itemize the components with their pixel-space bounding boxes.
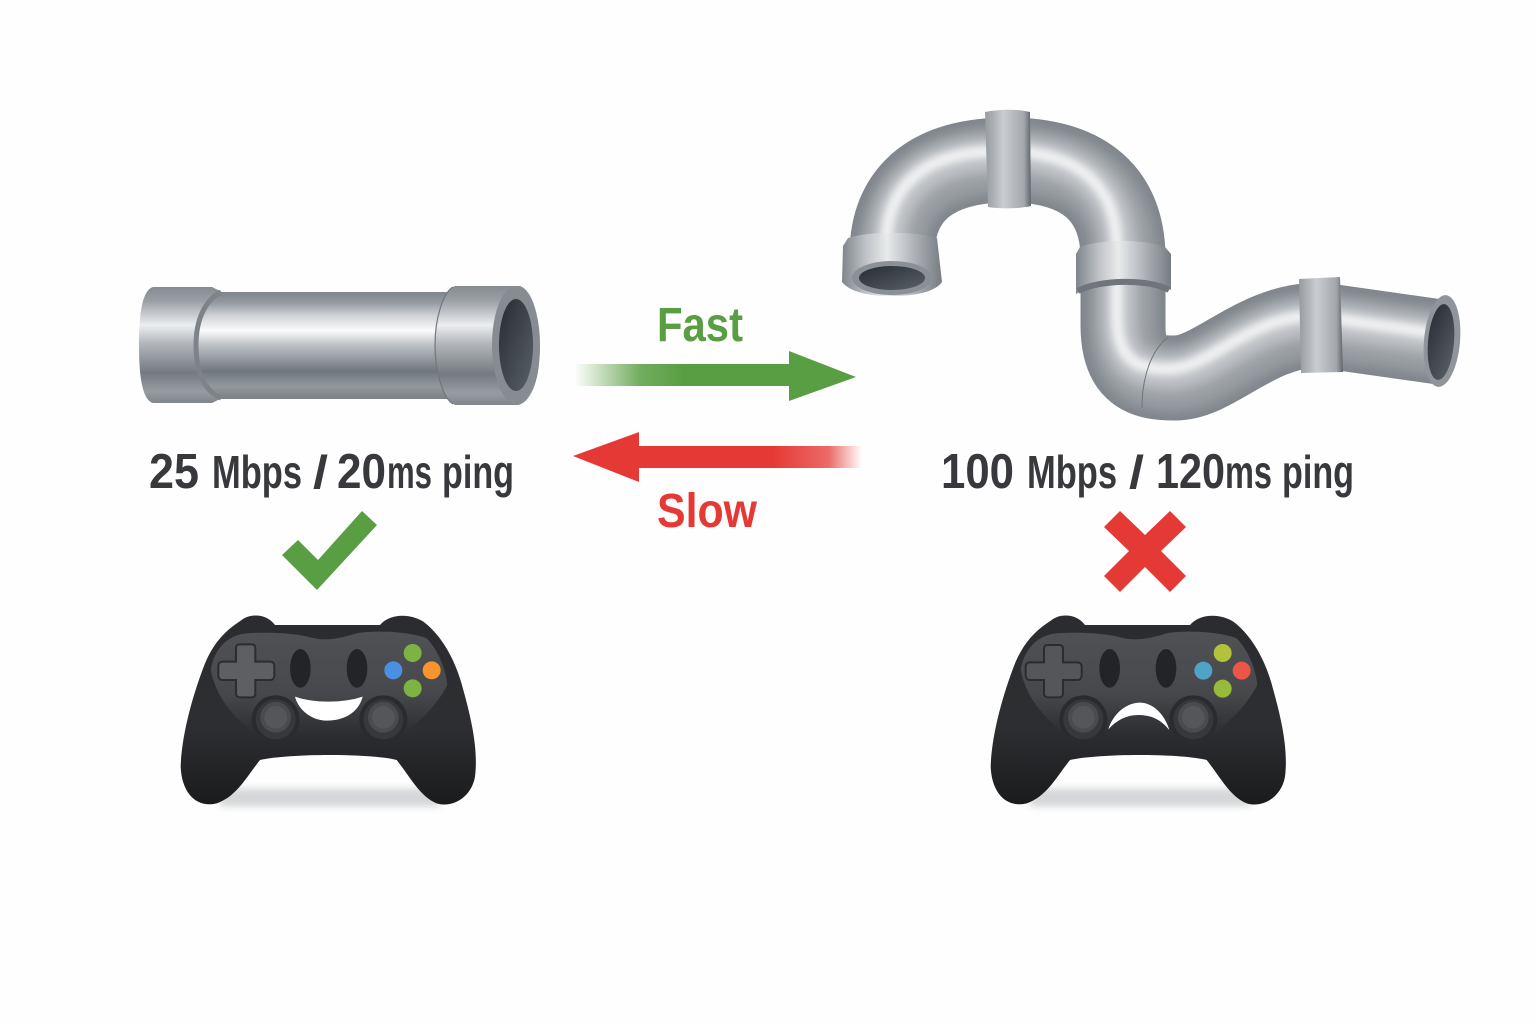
smile [295,697,363,721]
arrow: fast [575,351,856,401]
right eye [1156,649,1176,688]
right opening [1420,294,1464,388]
tube shading [886,151,1447,378]
left eye [290,649,311,688]
d-pad [1026,645,1082,697]
label: fast: Fast [657,299,743,352]
right stick [359,695,407,743]
label: low ping connection: ms [387,446,432,498]
green button [404,644,422,662]
arrow head [789,351,856,401]
controller body [991,615,1286,804]
teal button [1194,662,1212,680]
icon: cross mark [1104,511,1186,592]
right eye [347,649,367,688]
label: slow: Slow [657,485,758,538]
middle band lip [1078,282,1169,291]
left stick [252,695,300,743]
arrow head [573,432,639,482]
label: low ping connection: Mbps [212,446,302,498]
left opening interior [859,266,925,290]
pipe body [195,292,450,399]
curved pipe [842,110,1464,408]
label: high ping connection: 120 [1156,445,1225,499]
label: low ping connection: / [313,446,328,498]
label: high ping connection: 100 [941,445,1014,499]
right opening interior [1425,303,1457,381]
right collar edge [435,287,453,404]
arrow: slow [573,432,862,482]
orange button [423,661,441,679]
left collar [139,287,222,403]
shadow [1030,788,1250,807]
label: low ping connection: 25 [149,445,199,499]
label: high ping connection: ping [1282,446,1354,498]
straight pipe [139,286,540,405]
label: high ping connection [941,445,1354,499]
pipe opening interior [499,299,533,391]
d-pad [218,644,274,697]
middle band [1076,241,1171,294]
red button [1233,662,1251,680]
icon: check mark [282,511,377,590]
left collar groove [196,292,221,398]
frown [1108,703,1169,730]
controller body [181,615,476,804]
right band [1299,277,1343,373]
green button [404,679,422,697]
right collar [435,286,540,405]
top band [985,110,1031,208]
label: high ping connection: / [1129,446,1144,498]
pipe opening [492,286,540,404]
green button [1214,680,1232,698]
sad controller [991,615,1286,807]
yellow-green button [1214,644,1232,662]
arrow tail [638,446,862,468]
label: low ping connection [149,445,514,499]
left opening [852,261,932,295]
bend seam [1142,337,1168,408]
shadow [220,788,440,807]
label: low ping connection: 20 [337,445,386,499]
arrow tail [575,364,791,386]
label: high ping connection: Mbps [1027,446,1117,498]
left stick [1059,695,1107,743]
happy controller [181,615,476,807]
left collar [842,233,942,296]
blue button [384,661,402,679]
label: high ping connection: ms [1225,446,1272,498]
label: low ping connection: ping [442,446,514,498]
right stick [1169,695,1217,743]
left eye [1099,649,1120,688]
